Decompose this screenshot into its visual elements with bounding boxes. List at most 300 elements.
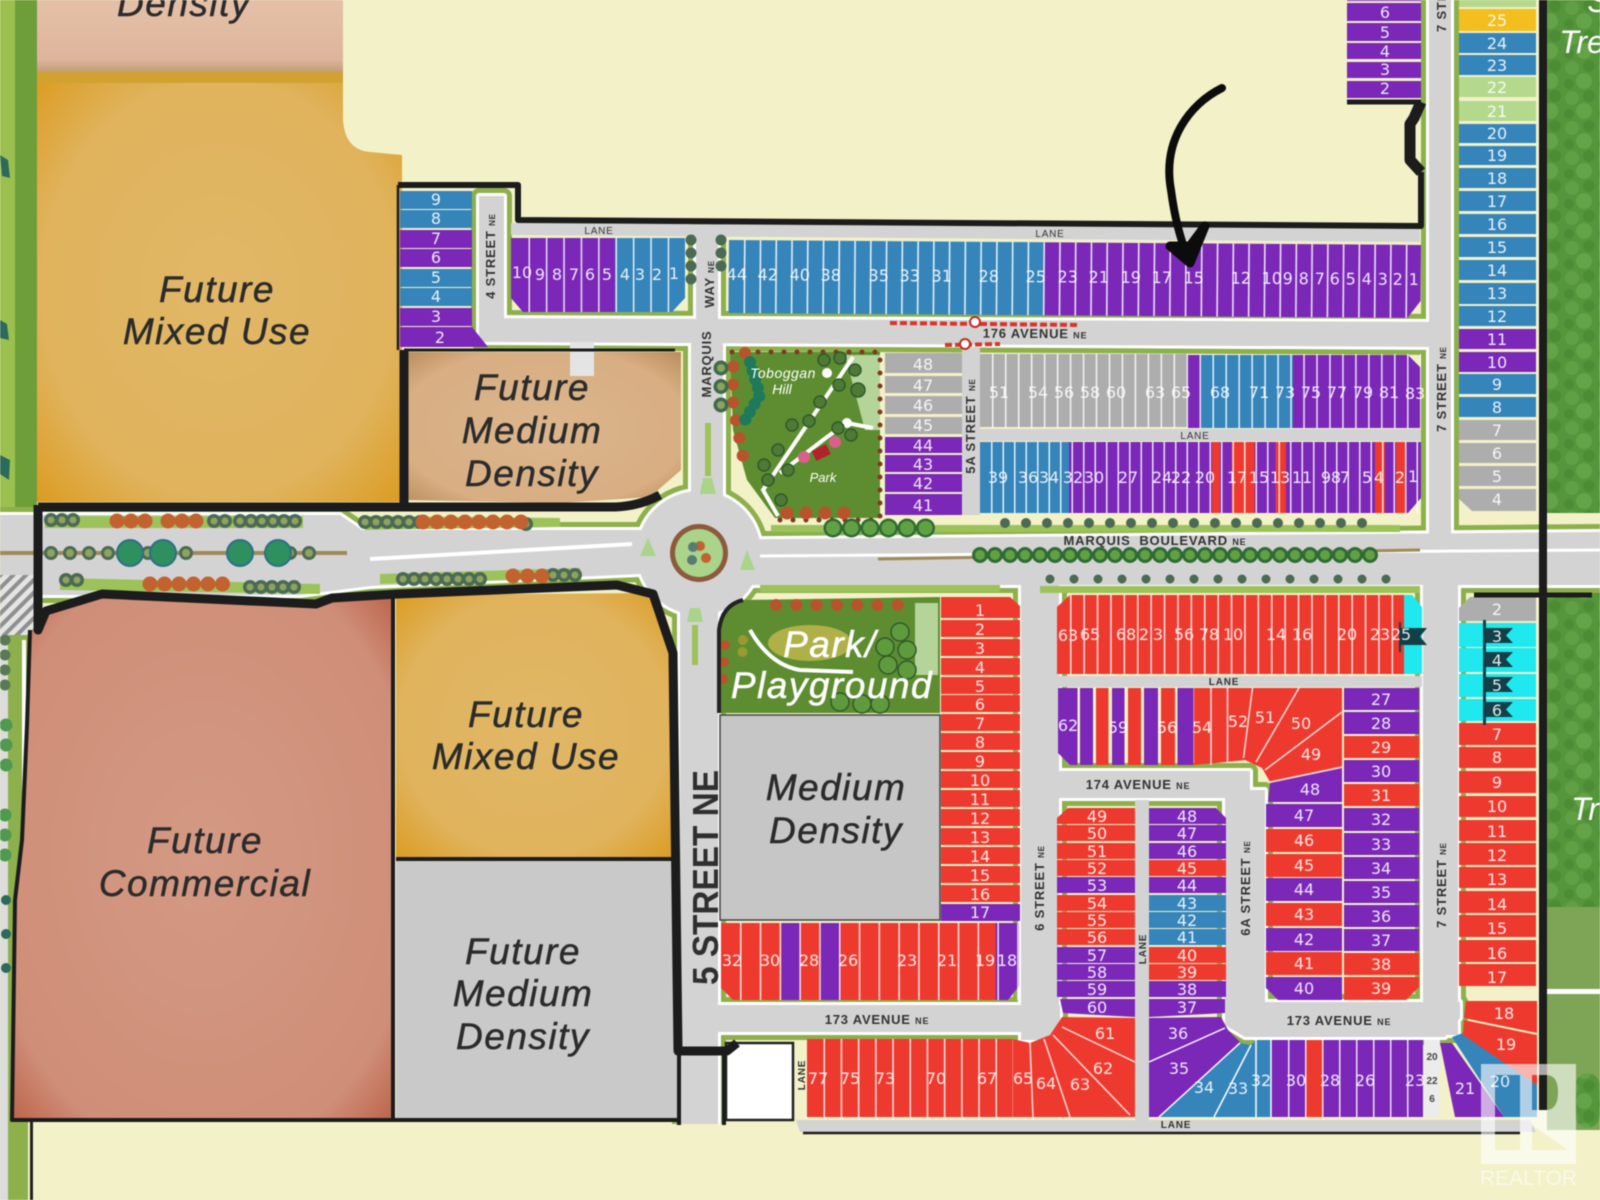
lots: column 48 to 40: 41 <box>1294 954 1314 973</box>
lots: column 49 to 60: 56 <box>1087 928 1107 947</box>
lots: column 49 to 60: 54 <box>1087 894 1107 913</box>
lots: column 48 to 41 <box>885 353 962 515</box>
lots: block 39 to 1 north of Marquis Boulevard: 13 <box>1270 468 1290 487</box>
lots: top purple block <box>1347 0 1421 98</box>
crosswalk hatch west <box>0 575 34 635</box>
lots: column 1 to 17 beside 6 Street: 13 <box>970 828 990 847</box>
flags on lots 3 to 6 <box>1483 620 1513 725</box>
lots: block 44 to 1 north of 176 Avenue: 12 <box>1230 269 1251 288</box>
lots: column 48 to 40: 47 <box>1294 806 1314 825</box>
lots: column 48 to 40: 44 <box>1294 880 1314 899</box>
lots: column 49 to 60: 51 <box>1087 842 1107 861</box>
lots: column 1 to 17 beside 6 Street: 9 <box>975 752 985 771</box>
lots: block 51 to 83 south of 176 Avenue: 60 <box>1106 383 1126 402</box>
lots: column 48 to 41: 45 <box>913 416 933 435</box>
road labels: 4 STREET NE <box>483 213 498 299</box>
lots: block 62 to 49 with fan: 52 <box>1228 712 1248 731</box>
lots: column 27 to 39: 39 <box>1371 979 1391 998</box>
lots: column along 7 Street south: 10 <box>1487 797 1507 816</box>
road labels: 176 AVENUE NE <box>983 326 1087 341</box>
lots: block 10 to 1 north of 176 Avenue: 1 <box>669 264 679 283</box>
road labels: LANE <box>797 1060 808 1090</box>
lots: column along 7 Street north: 16 <box>1487 215 1507 234</box>
lots: block 51 to 83 south of 176 Avenue: 68 <box>1210 383 1230 402</box>
panel: future medium density grey: Future <box>465 931 581 972</box>
lots: block 36 to 18 south of 173 Avenue: 19 <box>1496 1035 1516 1054</box>
lots: column 27 to 39: 29 <box>1371 738 1391 757</box>
panel: medium density: Density <box>769 810 904 851</box>
lots: row 32 to 18: 28 <box>799 951 819 970</box>
lots: row 32 to 18: 21 <box>937 951 957 970</box>
lots: column 27 to 39: 36 <box>1371 907 1391 926</box>
lots: block 62 to 49 with fan: 59 <box>1108 718 1128 737</box>
no-parking hatch on 176 Avenue <box>890 317 1080 349</box>
road labels: 173 AVENUE NE <box>1287 1013 1391 1028</box>
lots: row 32 to 18: 18 <box>997 951 1017 970</box>
lots: column 48 to 37: 43 <box>1177 894 1197 913</box>
lots: column along 7 Street south <box>1459 597 1536 987</box>
lots: block 51 to 83 south of 176 Avenue: 58 <box>1080 383 1100 402</box>
lots: column 1 to 17 beside 6 Street: 6 <box>975 695 985 714</box>
lots: column along 7 Street north: 12 <box>1487 307 1507 326</box>
lots: block 51 to 83 south of 176 Avenue: 73 <box>1275 383 1295 402</box>
lots: column 1 to 17 beside 6 Street: 11 <box>970 790 990 809</box>
lots: 4 Street block <box>400 190 488 347</box>
lots: column 48 to 41: 48 <box>913 355 933 374</box>
panel: future commercial <box>12 594 393 1120</box>
lots: block 10 to 1 north of 176 Avenue: 6 <box>585 265 595 284</box>
lots: column along 7 Street north: 25 <box>1487 11 1507 30</box>
lanes and minor streets <box>340 223 1536 1132</box>
lots: column 48 to 37: 48 <box>1177 807 1197 826</box>
panel: toboggan hill park <box>730 352 880 520</box>
boulevard medians and trees <box>0 423 1600 665</box>
lots: column 27 to 39: 30 <box>1371 762 1391 781</box>
lots: column 1 to 17 beside 6 Street: 3 <box>975 639 985 658</box>
lots: block 39 to 1 north of Marquis Boulevard <box>980 442 1421 513</box>
lots: column along 7 Street north: 23 <box>1487 56 1507 75</box>
lots: block 10 to 1 north of 176 Avenue: 9 <box>535 265 545 284</box>
lots: column 48 to 37: 39 <box>1177 963 1197 982</box>
lots: column 1 to 17 beside 6 Street: 1 <box>975 601 985 620</box>
lots: block 36 to 18 south of 173 Avenue: 21 <box>1455 1079 1475 1098</box>
lots: column 27 to 39: 28 <box>1371 714 1391 733</box>
lots: column along 7 Street north: 18 <box>1487 169 1507 188</box>
road labels: LANE <box>1138 934 1149 964</box>
lots: block 10 to 1 north of 176 Avenue: 3 <box>635 265 645 284</box>
lots: column 49 to 60: 52 <box>1087 859 1107 878</box>
lots: block 62 to 49 with fan: 54 <box>1192 718 1212 737</box>
lots: block 51 to 83 south of 176 Avenue: 77 <box>1327 383 1347 402</box>
lots: column 1 to 17 beside 6 Street: 14 <box>970 847 990 866</box>
right tree belt <box>1547 0 1600 1130</box>
lots: block 39 to 1 north of Marquis Boulevard: 15 <box>1249 468 1269 487</box>
lots: row 32 to 18: 23 <box>897 951 917 970</box>
lots: block 51 to 83 south of 176 Avenue: 54 <box>1028 383 1048 402</box>
lots: block 77 to 61 south of 173 Avenue: 63 <box>1070 1075 1090 1094</box>
lots: block 51 to 83 south of 176 Avenue: 56 <box>1054 383 1074 402</box>
watermark: REALTOR logo <box>1480 1064 1577 1190</box>
lots: column 48 to 37: 41 <box>1177 928 1197 947</box>
lots: column along 7 Street south: 15 <box>1487 919 1507 938</box>
lots: column along 7 Street north: 4 <box>1492 490 1502 509</box>
lots: row 32 to 18 <box>721 923 1019 1000</box>
lots: block 63 to 25: 56 <box>1174 625 1194 644</box>
lots: block 10 to 1 north of 176 Avenue: 5 <box>602 265 612 284</box>
lots: block 77 to 61 south of 173 Avenue: 64 <box>1036 1074 1056 1093</box>
lots: block 36 to 18 south of 173 Avenue: 36 <box>1168 1024 1188 1043</box>
road labels: LANE <box>1161 1120 1191 1131</box>
lots: block 39 to 1 north of Marquis Boulevard: 2 <box>1395 468 1405 487</box>
lots: column 49 to 60: 59 <box>1087 980 1107 999</box>
lots: column 27 to 39: 27 <box>1371 690 1391 709</box>
lots: block 44 to 1 north of 176 Avenue: 10 <box>1261 269 1282 288</box>
left green verge <box>0 0 37 1200</box>
lots: column along 7 Street north: 5 <box>1492 467 1502 486</box>
road labels: MARQUIS <box>699 330 714 398</box>
lots: block 39 to 1 north of Marquis Boulevard: 5 <box>1362 468 1372 487</box>
lots: top purple block: 5 <box>1380 23 1390 42</box>
lots: block 39 to 1 north of Marquis Boulevard: 9 <box>1321 468 1331 487</box>
lots: block 51 to 83 south of 176 Avenue: 63 <box>1145 383 1165 402</box>
lots: block 63 to 25: 23 <box>1370 625 1390 644</box>
lots: top purple block: 2 <box>1380 79 1390 98</box>
white utility lot <box>726 1043 793 1120</box>
lots: block 44 to 1 north of 176 Avenue: 6 <box>1330 269 1340 288</box>
lots: column 27 to 39: 35 <box>1371 883 1391 902</box>
panel: future commercial: Future <box>147 820 263 861</box>
lots: column along 7 Street north: 6 <box>1492 444 1502 463</box>
lots: block 44 to 1 north of 176 Avenue: 7 <box>1315 269 1325 288</box>
lots: block 62 to 49 with fan: 49 <box>1301 745 1321 764</box>
lots: block 44 to 1 north of 176 Avenue: 40 <box>790 265 810 285</box>
lots: block 44 to 1 north of 176 Avenue: 4 <box>1362 270 1372 289</box>
lots: row 32 to 18: 32 <box>722 951 742 970</box>
lots: column 27 to 39: 31 <box>1371 786 1391 805</box>
panel: future medium density grey: Density <box>456 1016 591 1057</box>
lots: column 48 to 40: 42 <box>1294 930 1314 949</box>
panel: future medium density tan: Future <box>474 367 590 408</box>
lots: column 1 to 17 beside 6 Street: 16 <box>970 885 990 904</box>
lots: block 63 to 25: 78 <box>1199 625 1219 644</box>
lots: column along 7 Street south: 11 <box>1487 822 1507 841</box>
lots: block 77 to 61 south of 173 Avenue: 77 <box>808 1069 828 1088</box>
lots: block 44 to 1 north of 176 Avenue: 8 <box>1299 269 1309 288</box>
lots: block 62 to 49 with fan: 51 <box>1255 708 1275 727</box>
lots: block 36 to 18 south of 173 Avenue: 23 <box>1405 1071 1425 1090</box>
lots: column 1 to 17 beside 6 Street: 2 <box>975 620 985 639</box>
lots: block 36 to 18 south of 173 Avenue: 28 <box>1320 1071 1340 1090</box>
lots: block 63 to 25: 3 <box>1153 625 1163 644</box>
lots: column 1 to 17 beside 6 Street: 5 <box>975 677 985 696</box>
lots: column 49 to 60: 60 <box>1087 998 1107 1017</box>
lots: column 49 to 60: 50 <box>1087 824 1107 843</box>
lots: column 27 to 39: 33 <box>1371 835 1391 854</box>
road labels: WAY NE <box>702 260 717 308</box>
lots: block 36 to 18 south of 173 Avenue: 35 <box>1169 1059 1189 1078</box>
lots: column 27 to 39: 32 <box>1371 810 1391 829</box>
trees along Marquis Way <box>691 240 721 406</box>
lots: block 36 to 18 south of 173 Avenue: 6 <box>1429 1094 1435 1105</box>
lots: column 48 to 37: 45 <box>1177 859 1197 878</box>
lots: column along 7 Street north: 17 <box>1487 192 1507 211</box>
lots: column 1 to 17 beside 6 Street: 10 <box>970 771 990 790</box>
lots: 4 Street block: 8 <box>431 209 441 228</box>
lots: column 48 to 41: 41 <box>913 496 933 515</box>
lots: block 44 to 1 north of 176 Avenue: 23 <box>1057 267 1078 286</box>
panel: future mixed use north: Future <box>159 269 275 310</box>
lots: block 63 to 25: 10 <box>1223 625 1243 644</box>
lots: block 63 to 25: 65 <box>1080 625 1100 644</box>
lots: block 62 to 49 with fan: 50 <box>1291 714 1311 733</box>
lots: block 39 to 1 north of Marquis Boulevard: 30 <box>1084 468 1104 487</box>
lots: block 10 to 1 north of 176 Avenue <box>511 238 685 312</box>
lots: column along 7 Street north: 9 <box>1492 375 1502 394</box>
lots: column along 7 Street south: 9 <box>1492 773 1502 792</box>
lots: column along 7 Street south: 5 <box>1492 676 1502 695</box>
lots: column 27 to 39 <box>1344 688 1419 1000</box>
lots: 4 Street block: 7 <box>431 229 441 248</box>
lots: column 48 to 40: 45 <box>1294 856 1314 875</box>
lots: block 10 to 1 north of 176 Avenue: 10 <box>512 263 532 282</box>
lots: row 32 to 18: 26 <box>838 951 858 970</box>
lots: block 51 to 83 south of 176 Avenue <box>980 354 1425 428</box>
lots: column 1 to 17 beside 6 Street <box>941 597 1020 922</box>
lots: block 63 to 25: 68 <box>1116 625 1136 644</box>
lots: column along 7 Street north: 15 <box>1487 238 1507 257</box>
panel: park playground: Park/ <box>783 624 879 665</box>
flag on lot 25 <box>1399 622 1427 652</box>
lots: 4 Street block: 4 <box>431 287 441 306</box>
lots: block 51 to 83 south of 176 Avenue: 71 <box>1249 383 1269 402</box>
lots: block 63 to 25: 20 <box>1337 625 1357 644</box>
lots: column 1 to 17 beside 6 Street: 17 <box>970 903 990 922</box>
lots: column 48 to 40: 46 <box>1294 831 1314 850</box>
lots: block 36 to 18 south of 173 Avenue <box>1149 1001 1537 1117</box>
lots: block 44 to 1 north of 176 Avenue: 21 <box>1088 268 1109 287</box>
lots: block 63 to 25: 25 <box>1391 625 1411 644</box>
panel: future mixed use south: Mixed Use <box>432 736 620 777</box>
lots: block 51 to 83 south of 176 Avenue: 65 <box>1171 383 1191 402</box>
lots: block 39 to 1 north of Marquis Boulevard: 7 <box>1340 468 1350 487</box>
lots: 4 Street block: 3 <box>431 307 441 326</box>
road labels: MARQUIS BOULEVARD NE <box>1064 533 1246 548</box>
panel: future mixed use south <box>396 593 673 859</box>
road labels: 173 AVENUE NE <box>825 1012 929 1027</box>
lots: column along 7 Street north <box>1459 0 1536 511</box>
lots: column 1 to 17 beside 6 Street: 8 <box>975 733 985 752</box>
lots: column 1 to 17 beside 6 Street: 15 <box>970 866 990 885</box>
lots: block 39 to 1 north of Marquis Boulevard: 11 <box>1292 468 1312 487</box>
lots: block 51 to 83 south of 176 Avenue: 81 <box>1379 383 1399 402</box>
lots: column along 7 Street south: 6 <box>1492 701 1502 720</box>
lots: column 48 to 41: 43 <box>913 455 933 474</box>
lots: block 39 to 1 north of Marquis Boulevard: 27 <box>1118 468 1138 487</box>
lots: block 44 to 1 north of 176 Avenue <box>726 240 1421 318</box>
lots: block 36 to 18 south of 173 Avenue: 34 <box>1194 1078 1214 1097</box>
road labels: 6 STREET NE <box>1032 845 1047 931</box>
lots: block 44 to 1 north of 176 Avenue: 17 <box>1151 268 1172 287</box>
lots: block 63 to 25: 14 <box>1266 625 1286 644</box>
lots: column along 7 Street north: 14 <box>1487 261 1507 280</box>
lots: column along 7 Street north: 19 <box>1487 146 1507 165</box>
lots: column along 7 Street south: 17 <box>1487 968 1507 987</box>
lots: block 62 to 49 with fan: 62 <box>1058 716 1078 735</box>
lots: block 63 to 25: 63 <box>1058 626 1078 645</box>
lots: block 51 to 83 south of 176 Avenue: 51 <box>989 383 1009 402</box>
lots: 4 Street block: 5 <box>431 268 441 287</box>
panel: future medium density tan: Density <box>465 453 600 494</box>
panel: future mixed use south: Future <box>468 694 584 735</box>
lots: block 62 to 49 with fan: 56 <box>1157 718 1177 737</box>
lots: column 48 to 37: 46 <box>1177 842 1197 861</box>
lots: column 49 to 60 <box>1057 807 1135 1017</box>
lots: block 10 to 1 north of 176 Avenue: 4 <box>620 265 630 284</box>
lots: column 48 to 40 <box>1266 768 1342 1000</box>
lots: column along 7 Street south: 8 <box>1492 748 1502 767</box>
lots: column 49 to 60: 49 <box>1087 807 1107 826</box>
lots: block 39 to 1 north of Marquis Boulevard: 22 <box>1171 468 1191 487</box>
lots: column along 7 Street south: 7 <box>1492 725 1502 744</box>
lots: block 39 to 1 north of Marquis Boulevard: 8 <box>1331 468 1341 487</box>
panel: future medium density tan: Medium <box>462 410 602 451</box>
lots: block 63 to 25: 16 <box>1292 625 1312 644</box>
lots: column along 7 Street north: 24 <box>1487 34 1507 53</box>
panel: park playground: Playground <box>731 665 933 706</box>
panel: future medium density tan <box>405 352 681 503</box>
panel: future density top <box>37 0 343 74</box>
lots: top purple block: 3 <box>1380 60 1390 79</box>
lots: 4 Street block: 6 <box>431 248 441 267</box>
panel: toboggan hill park: Hill <box>772 381 793 397</box>
road labels: 174 AVENUE NE <box>1086 777 1190 792</box>
lots: column 27 to 39: 38 <box>1371 955 1391 974</box>
lots: block 44 to 1 north of 176 Avenue: 31 <box>932 266 952 286</box>
lots: block 10 to 1 north of 176 Avenue: 2 <box>652 265 662 284</box>
lots: column 48 to 37: 44 <box>1177 876 1197 895</box>
lots: column along 7 Street north: 10 <box>1487 353 1507 372</box>
lots: block 36 to 18 south of 173 Avenue: 20 <box>1426 1052 1438 1063</box>
lots: block 77 to 61 south of 173 Avenue: 65 <box>1013 1069 1033 1088</box>
lots: column 48 to 41: 44 <box>913 436 933 455</box>
watermark: REALTOR logo: REALTOR <box>1480 1167 1577 1190</box>
street label: 5 Street NE: 5 STREET NE <box>685 770 726 985</box>
lots: block 44 to 1 north of 176 Avenue: 38 <box>821 266 841 285</box>
lots: block 44 to 1 north of 176 Avenue: 15 <box>1183 268 1204 287</box>
lots: block 77 to 61 south of 173 Avenue: 70 <box>926 1069 946 1088</box>
lots: block 39 to 1 north of Marquis Boulevard: 32 <box>1063 468 1083 487</box>
lots: block 36 to 18 south of 173 Avenue: 26 <box>1355 1071 1375 1090</box>
lots: block 10 to 1 north of 176 Avenue: 8 <box>552 265 562 284</box>
lots: block 44 to 1 north of 176 Avenue: 25 <box>1025 267 1046 286</box>
lots: column along 7 Street south: 14 <box>1487 895 1507 914</box>
lots: column 48 to 41: 47 <box>913 376 933 395</box>
lots: block 63 to 25: 2 <box>1139 625 1149 644</box>
lots: block 44 to 1 north of 176 Avenue: 33 <box>900 266 920 285</box>
lots: block 77 to 61 south of 173 Avenue: 61 <box>1095 1024 1115 1043</box>
lots: block 51 to 83 south of 176 Avenue: 83 <box>1405 384 1425 403</box>
lots: column along 7 Street north: 11 <box>1487 330 1507 349</box>
road labels: LANE <box>1180 431 1210 442</box>
lots: block 36 to 18 south of 173 Avenue: 22 <box>1426 1076 1438 1087</box>
lots: block 44 to 1 north of 176 Avenue: 19 <box>1120 268 1141 287</box>
lots: block 77 to 61 south of 173 Avenue <box>807 1017 1135 1117</box>
lots: column 48 to 37 <box>1149 807 1226 1017</box>
lots: block 77 to 61 south of 173 Avenue: 75 <box>840 1069 860 1088</box>
lots: block 44 to 1 north of 176 Avenue: 5 <box>1346 269 1356 288</box>
lots: block 39 to 1 north of Marquis Boulevard: 17 <box>1227 468 1247 487</box>
lots: column 48 to 37: 37 <box>1177 998 1197 1017</box>
lots: column 48 to 40: 40 <box>1294 979 1314 998</box>
lots: block 36 to 18 south of 173 Avenue: 32 <box>1251 1071 1271 1090</box>
lots: block 36 to 18 south of 173 Avenue: 20 <box>1490 1072 1510 1091</box>
lots: column along 7 Street south: 2 <box>1492 600 1502 619</box>
lots: column 1 to 17 beside 6 Street: 7 <box>975 714 985 733</box>
tree reserve labels: Tr <box>1571 791 1600 827</box>
lots: block 63 to 25 <box>1057 595 1427 674</box>
lots: column along 7 Street south: 4 <box>1492 651 1502 670</box>
lots: block 39 to 1 north of Marquis Boulevard: 1 <box>1408 467 1418 486</box>
lots: column 1 to 17 beside 6 Street: 4 <box>975 658 985 677</box>
lots: block 51 to 83 south of 176 Avenue: 75 <box>1301 383 1321 402</box>
lots: column 48 to 40: 48 <box>1300 780 1320 799</box>
lots: block 44 to 1 north of 176 Avenue: 2 <box>1393 270 1403 289</box>
lots: column along 7 Street north: 22 <box>1487 78 1507 97</box>
lots: column along 7 Street south: 13 <box>1487 870 1507 889</box>
lots: column 27 to 39: 37 <box>1371 931 1391 950</box>
lots: column along 7 Street north: 8 <box>1492 398 1502 417</box>
lots: column along 7 Street north: 13 <box>1487 284 1507 303</box>
panel: park playground <box>718 597 940 713</box>
lots: block 39 to 1 north of Marquis Boulevard: 20 <box>1195 468 1215 487</box>
lots: block 10 to 1 north of 176 Avenue: 7 <box>569 265 579 284</box>
lots: block 44 to 1 north of 176 Avenue: 42 <box>758 265 778 284</box>
lots: block 44 to 1 north of 176 Avenue: 9 <box>1283 269 1293 288</box>
arrow pointing at lot 15 <box>1169 88 1222 263</box>
lots: block 62 to 49 with fan <box>1058 688 1342 782</box>
lots: top purple block: 6 <box>1380 3 1390 22</box>
lots: 4 Street block: 2 <box>435 328 445 347</box>
road labels: 5A STREET NE <box>963 378 978 474</box>
lots: column 1 to 17 beside 6 Street: 12 <box>970 809 990 828</box>
lots: column 48 to 37: 40 <box>1177 946 1197 965</box>
panel: medium density <box>720 715 940 920</box>
lots: column 49 to 60: 57 <box>1087 946 1107 965</box>
lots: block 39 to 1 north of Marquis Boulevard: 39 <box>988 468 1008 487</box>
road labels <box>483 0 1449 1131</box>
lots: block 39 to 1 north of Marquis Boulevard: 36 <box>1018 468 1038 487</box>
panel: future medium density grey <box>396 860 679 1120</box>
panel: toboggan hill park: Toboggan <box>750 365 816 381</box>
lots: column along 7 Street south: 16 <box>1487 944 1507 963</box>
lots: block 39 to 1 north of Marquis Boulevard: 24 <box>1152 468 1172 487</box>
lots: column 48 to 40: 43 <box>1294 905 1314 924</box>
lots: 4 Street block: 9 <box>431 190 441 209</box>
lots: block 44 to 1 north of 176 Avenue: 35 <box>869 266 889 285</box>
lots: column along 7 Street north: 20 <box>1487 124 1507 143</box>
road labels: 7 STREET NE <box>1434 842 1449 928</box>
panel: medium density: Medium <box>766 767 906 808</box>
road labels: LANE <box>584 226 614 237</box>
lots: block 77 to 61 south of 173 Avenue: 67 <box>977 1069 997 1088</box>
lots: column 48 to 41: 42 <box>913 474 933 493</box>
lots: block 39 to 1 north of Marquis Boulevard: 34 <box>1039 468 1059 487</box>
lots: row 32 to 18: 19 <box>975 951 995 970</box>
lots: column 49 to 60: 58 <box>1087 963 1107 982</box>
panel: future mixed use north <box>37 72 402 502</box>
tree reserve labels <box>1559 0 1600 827</box>
road labels: 6A STREET NE <box>1238 840 1253 936</box>
